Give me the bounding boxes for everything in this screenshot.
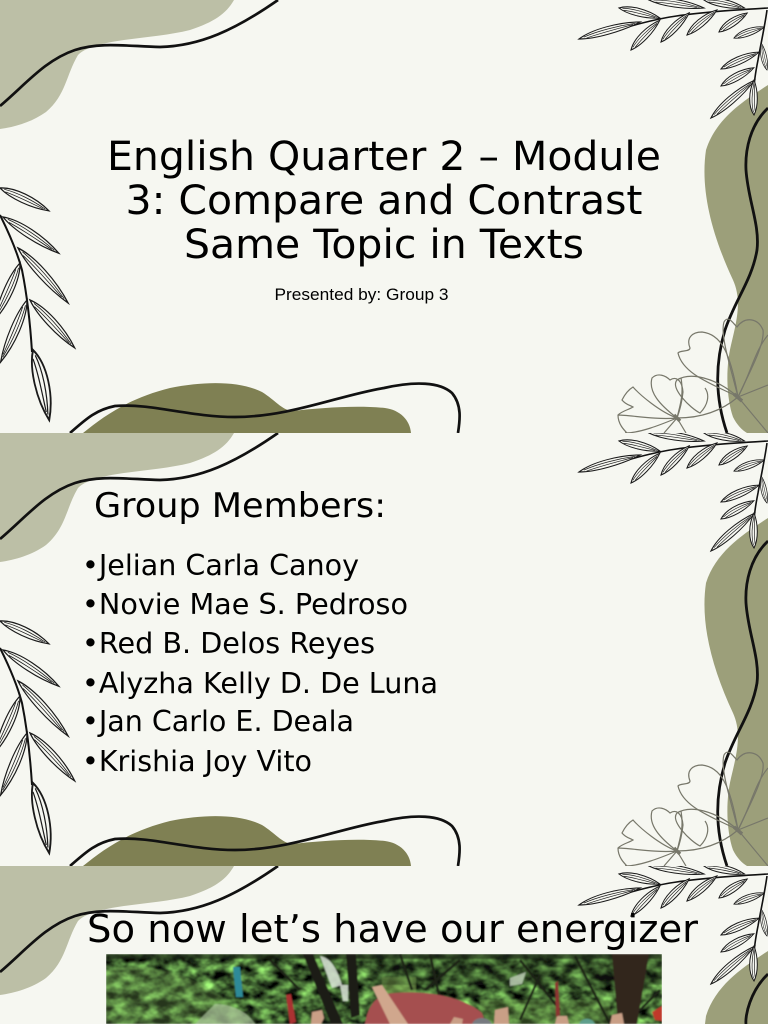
heading: energizer: So now let’s have our energizer <box>87 907 698 951</box>
member list: •Alyzha Kelly D. De Luna <box>82 667 438 700</box>
slide 3: energizer <box>0 862 768 1024</box>
member list: •Jelian Carla Canoy <box>82 549 359 582</box>
slide 2: group members <box>0 429 768 866</box>
member list <box>82 549 438 778</box>
member list: •Krishia Joy Vito <box>82 745 312 778</box>
photo: group of people with raised hands among trees <box>106 954 662 1024</box>
member list: •Jan Carlo E. Deala <box>82 705 354 738</box>
title line 2: 3: Compare and Contrast <box>126 176 642 224</box>
subtitle: presenter: Presented by: Group 3 <box>274 286 448 304</box>
slide 1: title slide <box>0 0 768 433</box>
member list: •Red B. Delos Reyes <box>82 627 375 660</box>
heading: group members: Group Members: <box>94 486 386 526</box>
member list: •Novie Mae S. Pedroso <box>82 588 408 621</box>
title: English Quarter 2 – Module <box>107 132 661 180</box>
title line 3: Same Topic in Texts <box>184 220 584 268</box>
